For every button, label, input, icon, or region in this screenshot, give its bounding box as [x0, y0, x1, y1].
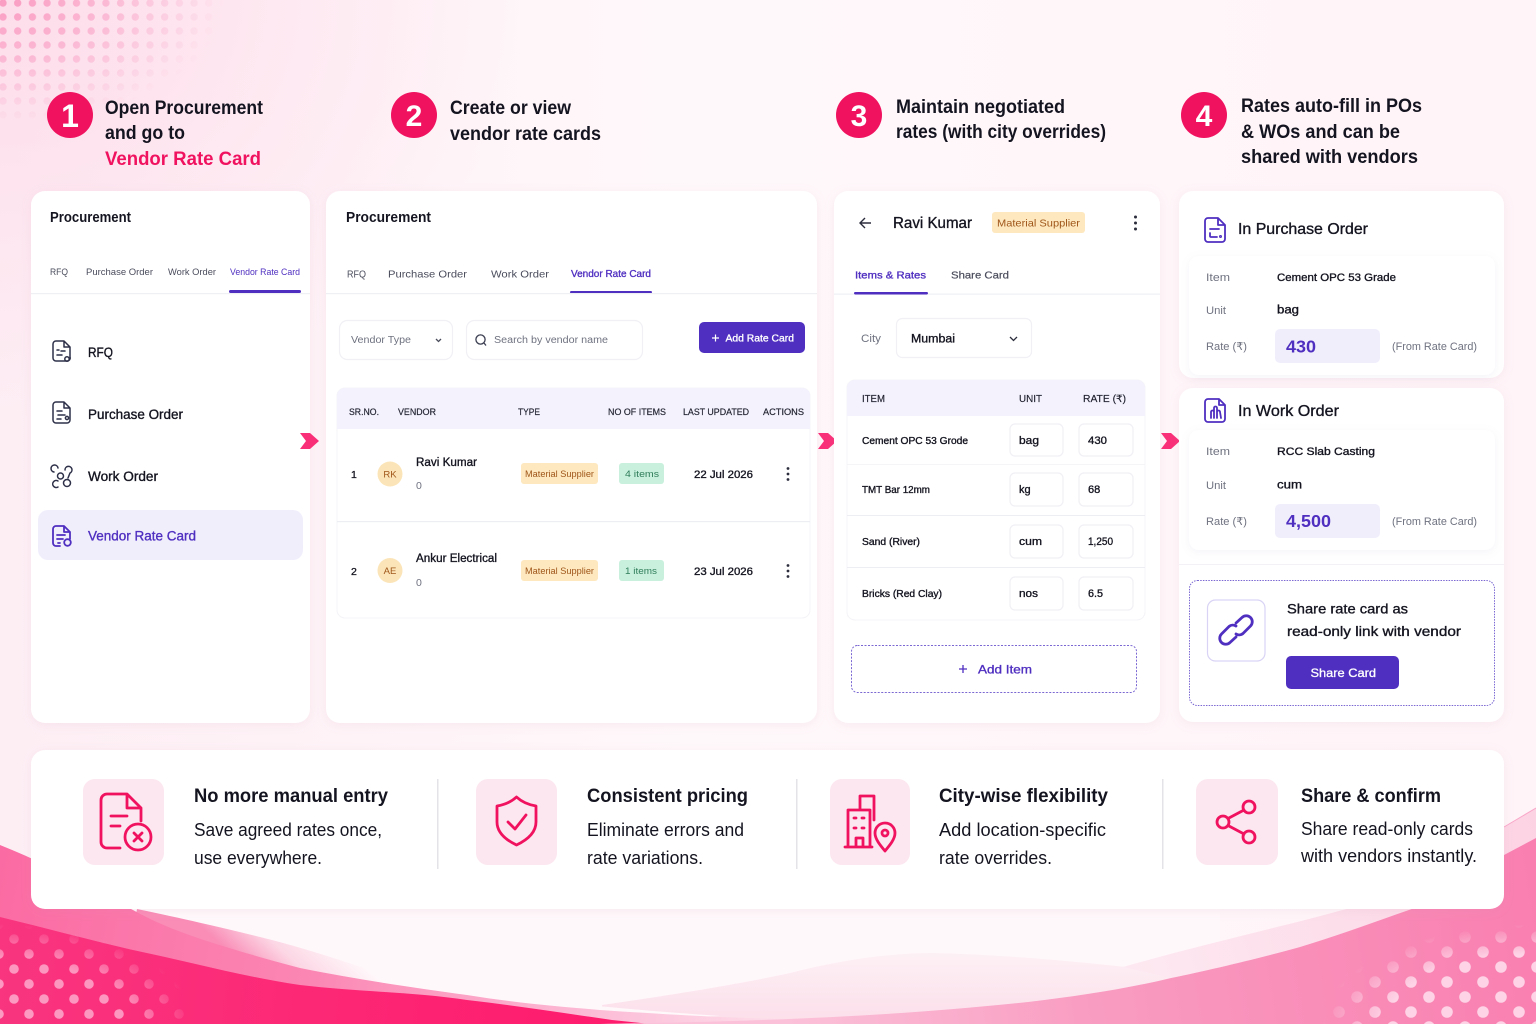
row: Ravi Kumar: RK [383, 470, 397, 480]
icon: vendor rate card document [53, 526, 71, 546]
arrow: step 2 to 3 [818, 433, 837, 449]
menu item: Work Order [51, 465, 159, 488]
row: Ravi Kumar: Ravi Kumar [416, 457, 477, 469]
row: cement [862, 424, 1133, 456]
panel heading: In Work Order [1238, 403, 1339, 420]
benefit: share and confirm [1196, 779, 1477, 866]
vendor table [337, 388, 810, 618]
benefit: share and confirm: Share & confirm [1301, 785, 1441, 807]
panel: vendor rate card list [326, 191, 817, 723]
panel: benefits [31, 750, 1504, 909]
step 1 heading [47, 92, 264, 170]
icon: share nodes [1196, 779, 1278, 865]
button: share card [1286, 656, 1399, 689]
row: Ankur Electrical: 1 items [625, 566, 657, 577]
benefit: consistent pricing: Consistent pricing [587, 785, 748, 807]
row: Ravi Kumar [351, 457, 789, 492]
purchase order details card: Cement OPC 53 Grade [1277, 272, 1396, 284]
row: TMT bar: 68 [1088, 484, 1100, 496]
benefit: no more manual entry: No more manual entry [194, 785, 388, 807]
row: Ankur Electrical: 2 [351, 566, 357, 578]
filter: vendor type: Vendor Type [351, 334, 411, 346]
share callout [1190, 580, 1494, 706]
benefit: share and confirm: Share read-only cards [1301, 819, 1473, 839]
step 2 number: 2 [406, 100, 422, 133]
benefit: no more manual entry: use everywhere. [194, 848, 322, 868]
row: bricks: Bricks (Red Clay) [862, 589, 942, 600]
row: TMT bar: kg [1019, 484, 1031, 496]
panel: in purchase order [1179, 191, 1504, 378]
step 4 number [1181, 92, 1227, 138]
work order details card: (From Rate Card) [1392, 516, 1477, 528]
panel: vendor detail [834, 191, 1160, 723]
panel 3 tabs [834, 270, 1160, 295]
row: Ravi Kumar: 0 [416, 480, 422, 492]
table header: SR.NO. [349, 407, 379, 418]
work order details card: Item [1206, 446, 1230, 458]
benefit: consistent pricing [476, 779, 748, 868]
step 4 heading [1181, 92, 1422, 168]
vendor type badge: Material Supplier [997, 218, 1081, 230]
panel: procurement menu [31, 191, 310, 723]
menu dots [1134, 216, 1137, 230]
panel 1 tabs: Vendor Rate Card [230, 267, 300, 278]
step 3 number: 3 [851, 100, 867, 133]
button: add rate card [699, 322, 805, 353]
city selector [861, 318, 1032, 358]
benefit: no more manual entry: Save agreed rates once, [194, 820, 382, 840]
row: Ankur Electrical: Ankur Electrical [416, 553, 497, 565]
step 3 text: rates (with city overrides) [896, 122, 1106, 143]
row: sand: Sand (River) [862, 537, 920, 548]
step 2 text [450, 98, 601, 145]
step 2 text: Create or view [450, 98, 571, 119]
step 1 text: Open Procurement [105, 98, 264, 119]
icon: work order nodes [51, 465, 72, 488]
menu item: RFQ: RFQ [88, 345, 113, 360]
menu item: Work Order: Work Order [88, 469, 159, 484]
city selector: Mumbai [911, 334, 955, 346]
panel 1 tabs: RFQ [50, 267, 68, 278]
panel 3 tabs: Share Card [951, 270, 1009, 282]
row: cement: 430 [1088, 435, 1107, 447]
panel 3 tabs: Items & Rates [855, 270, 926, 282]
row: cement: bag [1019, 435, 1039, 447]
row: cement: Cement OPC 53 Grode [862, 436, 968, 447]
table header: NO OF ITEMS [608, 407, 666, 418]
rates table [847, 380, 1145, 620]
step 1 number [47, 92, 93, 138]
panel 1 heading: Procurement [50, 210, 131, 226]
vendor type badge [992, 212, 1085, 233]
share callout: read-only link with vendor [1287, 624, 1462, 639]
step 4 text [1241, 96, 1422, 168]
button: add item [852, 646, 1136, 692]
panel 2 tabs [326, 268, 817, 294]
table header: LAST UPDATED [683, 407, 749, 418]
icon: purchase order document [53, 402, 70, 423]
icon: shield check [476, 779, 557, 865]
row: Ankur Electrical: Material Supplier [525, 566, 594, 576]
rates table header [862, 394, 1126, 405]
step 1 text: and go to [105, 123, 185, 144]
menu item: Purchase Order: Purchase Order [88, 407, 183, 422]
icon: RFQ document [53, 341, 70, 361]
step 2 heading [391, 92, 601, 145]
button: add item: Add Item [978, 662, 1032, 676]
step 3 text [896, 97, 1106, 143]
panel 2 tabs: RFQ [347, 268, 366, 280]
panel 1 tabs: Purchase Order [86, 267, 153, 278]
icon: link [1208, 600, 1265, 661]
icon: document with cross [83, 779, 164, 865]
work order details card: Rate (₹) [1206, 516, 1247, 528]
row: sand [862, 525, 1133, 558]
row: sand: 1,250 [1088, 536, 1113, 548]
step 1 text: Vendor Rate Card [105, 149, 261, 170]
row: sand: cum [1019, 536, 1042, 548]
icon: back arrow [860, 218, 871, 228]
row: Ravi Kumar: 4 items [625, 469, 659, 480]
table header [349, 407, 804, 418]
search box: Search by vendor name [494, 335, 608, 346]
purchase order details card: Unit [1206, 305, 1226, 317]
row: Ankur Electrical: 0 [416, 577, 422, 589]
purchase order details card: Item [1206, 272, 1230, 284]
arrow: step 1 to 2 [300, 433, 319, 449]
rates table header: UNIT [1019, 394, 1042, 405]
icon: buildings with pin [830, 779, 910, 865]
row: TMT bar: TMT Bar 12mm [862, 485, 930, 496]
arrow: step 3 to 4 [1161, 433, 1180, 449]
vendor name: Ravi Kumar [893, 215, 972, 232]
step 3 heading [836, 92, 1106, 143]
rates table header: RATE (₹) [1083, 394, 1126, 405]
row: Ankur Electrical: AE [384, 566, 396, 577]
step 2 text: vendor rate cards [450, 124, 601, 145]
step 2 number [391, 92, 437, 138]
row: bricks: 6.5 [1088, 588, 1103, 600]
work order details card: 4,500 [1286, 511, 1331, 531]
panel 2 heading: Procurement [346, 210, 431, 226]
purchase order details card: bag [1277, 304, 1299, 316]
menu item: RFQ [53, 341, 113, 361]
work order details card [1189, 430, 1495, 550]
panel 2 tabs: Vendor Rate Card [571, 268, 651, 280]
panel: in work order [1179, 388, 1504, 722]
panel 2 tabs: Work Order [491, 268, 550, 280]
work order details card: RCC Slab Casting [1277, 446, 1375, 458]
benefit: consistent pricing: Eliminate errors and [587, 820, 744, 840]
purchase order details card: Rate (₹) [1206, 341, 1247, 353]
row: bricks [862, 577, 1133, 610]
step 4 text: Rates auto-fill in POs [1241, 96, 1422, 117]
share callout: Share rate card as [1287, 602, 1408, 616]
row: Ravi Kumar: Material Supplier [525, 469, 594, 479]
table header: ACTIONS [763, 407, 804, 418]
row: Ravi Kumar: 1 [351, 469, 357, 481]
purchase order details card: (From Rate Card) [1392, 341, 1477, 353]
button: share card: Share Card [1310, 666, 1376, 680]
benefit: no more manual entry [83, 779, 388, 868]
step 4 text: shared with vendors [1241, 147, 1418, 168]
icon: work order [1205, 399, 1225, 422]
benefit: city-wise flexibility: City-wise flexibility [939, 785, 1108, 807]
row: Ravi Kumar: 22 Jul 2026 [694, 469, 753, 481]
filter: vendor type [340, 320, 452, 360]
menu item: Vendor Rate Card (active) [38, 510, 303, 560]
rates table header: ITEM [862, 394, 885, 405]
work order details card: Unit [1206, 480, 1226, 492]
benefit: city-wise flexibility: rate overrides. [939, 848, 1052, 868]
step 4 text: & WOs and can be [1241, 122, 1400, 143]
search box [466, 320, 642, 360]
menu item: Vendor Rate Card (active): Vendor Rate Card [88, 528, 196, 544]
step 3 number [836, 92, 882, 138]
city selector: City [861, 333, 882, 345]
panel 1 tabs [31, 267, 310, 294]
benefit: consistent pricing: rate variations. [587, 848, 703, 868]
row: Ankur Electrical [351, 553, 789, 589]
benefit: city-wise flexibility [830, 779, 1108, 868]
icon: purchase order [1205, 218, 1225, 242]
purchase order details card: 430 [1286, 336, 1316, 356]
step 4 number: 4 [1196, 100, 1213, 133]
row: bricks: nos [1019, 588, 1039, 600]
row: Ankur Electrical: 23 Jul 2026 [694, 566, 753, 578]
row: TMT bar [862, 473, 1133, 506]
table header: VENDOR [398, 407, 436, 418]
button: add rate card: Add Rate Card [726, 334, 794, 344]
work order details card: cum [1277, 480, 1302, 492]
purchase order details card [1189, 256, 1495, 375]
panel heading: In Purchase Order [1238, 221, 1368, 238]
step 1 text [105, 98, 264, 170]
benefit: share and confirm: with vendors instantly. [1300, 846, 1477, 866]
panel 1 tabs: Work Order [168, 267, 216, 278]
table header: TYPE [518, 407, 540, 418]
step 3 text: Maintain negotiated [896, 97, 1065, 118]
benefit: city-wise flexibility: Add location-specific [939, 820, 1106, 840]
step 1 number: 1 [61, 98, 79, 134]
panel 2 tabs: Purchase Order [388, 268, 468, 280]
menu item: Purchase Order [53, 402, 183, 423]
